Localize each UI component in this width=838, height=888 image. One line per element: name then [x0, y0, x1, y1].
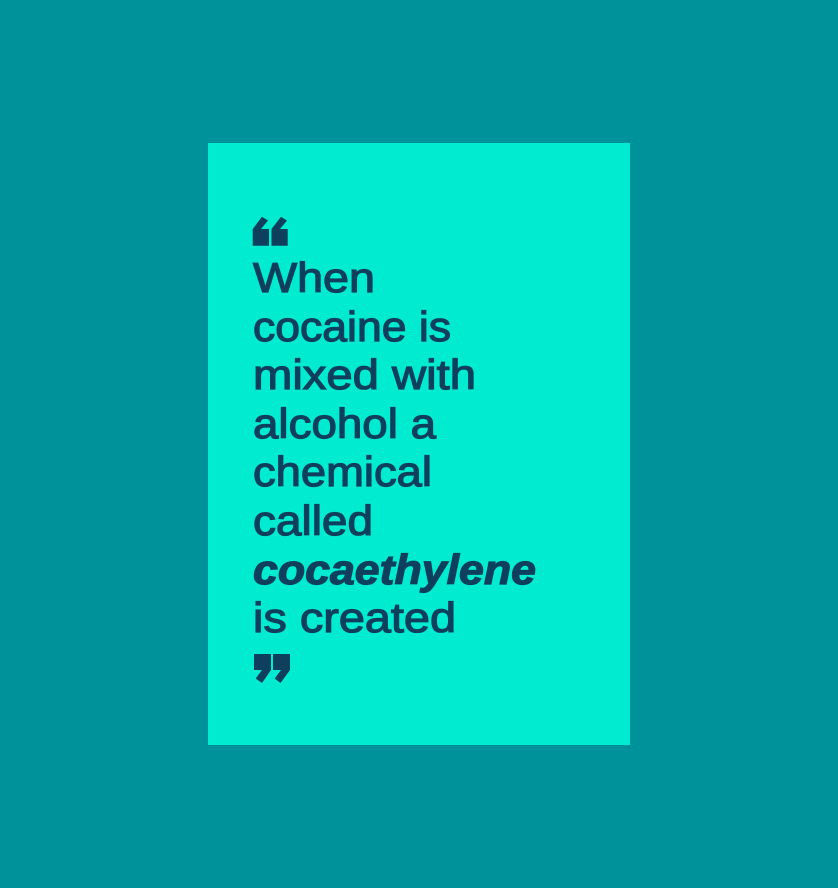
quote text: called	[253, 497, 373, 544]
quote text	[253, 254, 536, 641]
quote text: is created	[253, 594, 456, 641]
quote text: cocaethylene	[253, 546, 536, 593]
icon: opening quotation mark	[253, 217, 288, 246]
panel: quote card	[208, 143, 630, 745]
quote text: mixed with	[253, 351, 476, 398]
quote text: When	[253, 254, 375, 301]
icon: closing quotation mark	[254, 654, 290, 683]
quote text: cocaine is	[253, 303, 451, 350]
quote text: chemical	[253, 448, 432, 495]
quote text: alcohol a	[253, 400, 437, 447]
